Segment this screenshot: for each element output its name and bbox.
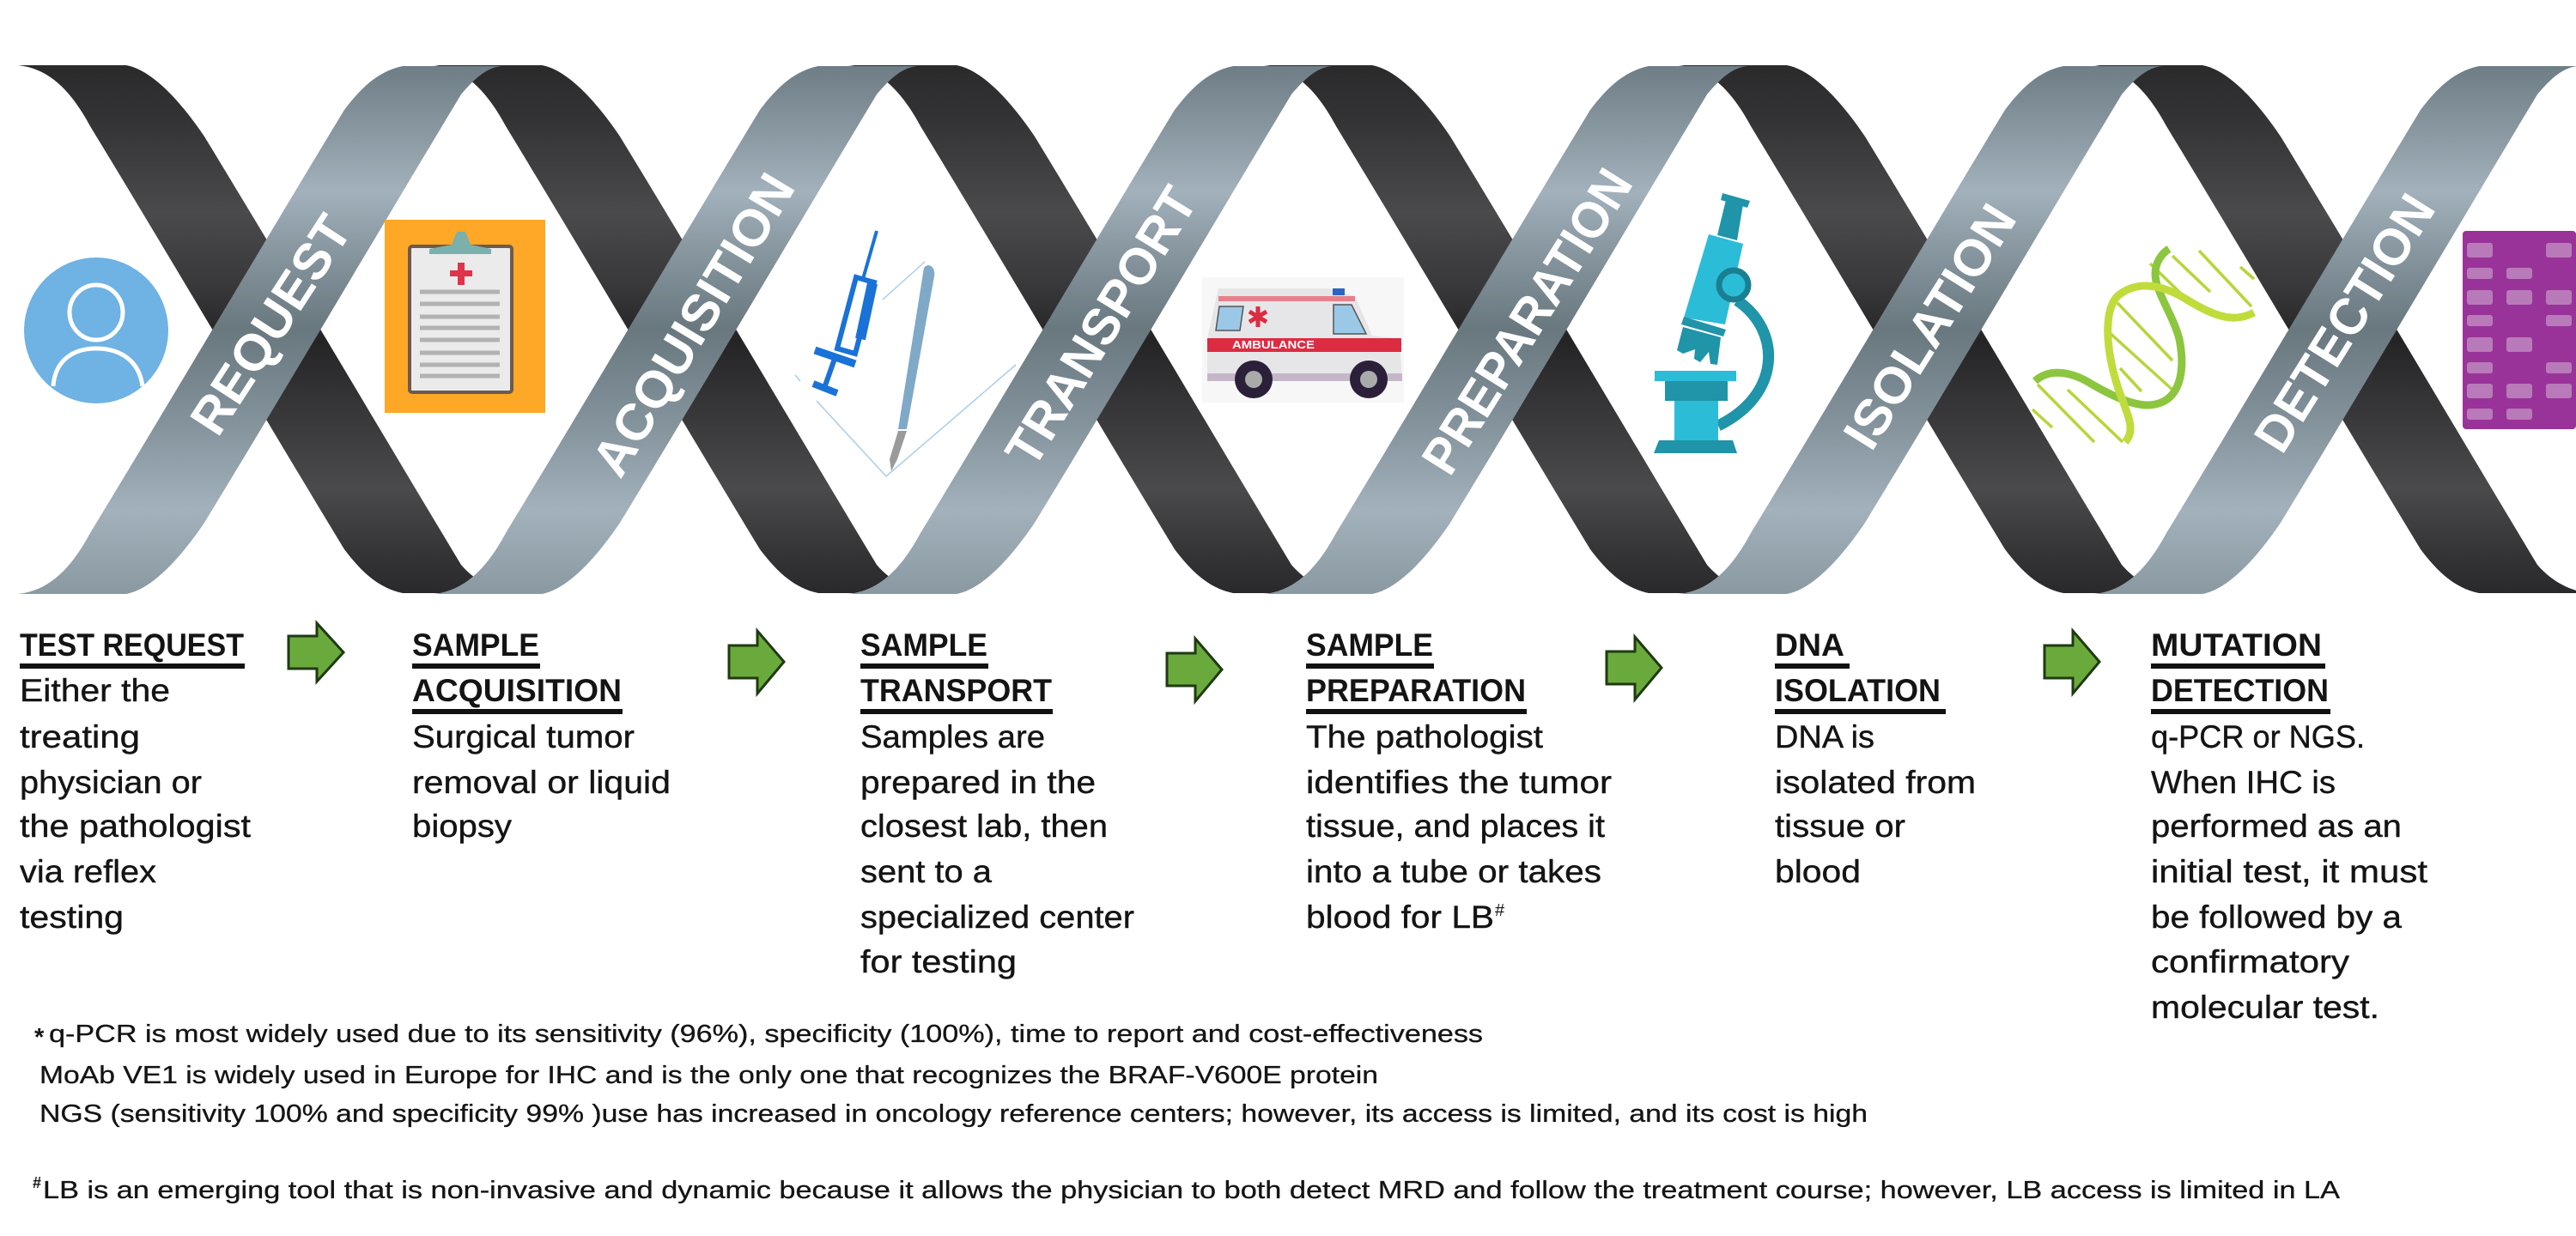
scalpel image frame lines — [795, 262, 1016, 476]
text block: DNA isolation: isolated from — [1775, 765, 1976, 800]
ribbon label: TRANSPORT: TRANSPORT — [994, 177, 1208, 476]
icon: gel electrophoresis — [2463, 231, 2576, 429]
helix ribbons — [18, 65, 2576, 594]
footnotes: q-PCR is most widely used due to its sensitivity (96%), specificity (100%), time to report and cost-effectiveness — [49, 1021, 1483, 1048]
text block: sample acquisition: Surgical tumor — [412, 719, 635, 754]
footnotes: * — [34, 1024, 45, 1051]
text block: DNA isolation: tissue or — [1775, 809, 1905, 844]
text block: sample acquisition: biopsy — [412, 809, 513, 844]
text block: test request: via reflex — [20, 854, 157, 889]
text block: sample transport — [860, 627, 1134, 979]
text block: mutation detection: q-PCR or NGS. — [2151, 719, 2365, 754]
icon: clipboard — [385, 220, 545, 413]
text block: test request: treating — [20, 719, 140, 754]
footnotes: # — [33, 1174, 41, 1191]
text block: test request: Either the — [20, 673, 170, 708]
arrow: acquisition to transport — [729, 631, 784, 694]
icon: scalpel — [890, 265, 934, 471]
text block: sample preparation: SAMPLE — [1306, 627, 1433, 663]
text block: test request: testing — [20, 900, 124, 935]
text block: mutation detection: MUTATION — [2151, 627, 2322, 663]
text block: sample preparation: PREPARATION — [1306, 673, 1526, 708]
text block: sample transport: TRANSPORT — [860, 673, 1052, 708]
text block: sample acquisition — [412, 627, 671, 844]
text block: mutation detection: initial test, it must — [2151, 854, 2428, 889]
text block: mutation detection: performed as an — [2151, 809, 2402, 844]
arrow: request to acquisition — [289, 623, 343, 682]
text block: sample preparation — [1306, 627, 1612, 935]
text block: DNA isolation — [1775, 627, 1976, 889]
footnotes: LB is an emerging tool that is non-invasive and dynamic because it allows the physician to both detect MRD and follow the treatment course; however, LB access is limited in LA — [43, 1177, 2341, 1204]
text block: sample transport: sent to a — [860, 854, 992, 889]
arrow: preparation to isolation — [1607, 637, 1662, 700]
arrow: transport to preparation — [1167, 639, 1222, 701]
dark strands — [18, 65, 2576, 593]
text block: sample acquisition: SAMPLE — [412, 627, 539, 663]
arrow: isolation to detection — [2044, 631, 2099, 694]
text block: sample transport: closest lab, then — [860, 809, 1108, 844]
text block: mutation detection — [2151, 627, 2428, 1025]
text block: sample transport: Samples are — [860, 719, 1045, 754]
footnotes: MoAb VE1 is widely used in Europe for IHC and is the only one that recognizes the BRAF-V600E protein — [39, 1062, 1378, 1089]
text block: mutation detection: be followed by a — [2151, 900, 2402, 935]
ribbon label: DETECTION: DETECTION — [2243, 184, 2446, 462]
ribbon label: PREPARATION: PREPARATION — [1411, 159, 1643, 484]
text block: mutation detection: molecular test. — [2151, 990, 2379, 1025]
footnotes — [33, 1021, 2341, 1204]
text block: mutation detection: confirmatory — [2151, 944, 2350, 979]
text block: test request: the pathologist — [20, 809, 252, 844]
text block: DNA isolation: blood — [1775, 854, 1861, 889]
icon: person — [24, 258, 168, 403]
text block: sample preparation: tissue, and places it — [1306, 809, 1606, 844]
text block: DNA isolation: DNA — [1775, 627, 1844, 663]
text block: sample transport: specialized center — [860, 900, 1134, 935]
text block: sample transport: for testing — [860, 944, 1017, 979]
text block: sample preparation: The pathologist — [1306, 719, 1544, 754]
icon: ambulance: AMBULANCE — [1232, 338, 1315, 351]
grey strands — [18, 66, 2576, 594]
icon: DNA — [2032, 249, 2254, 442]
icon: syringe — [813, 231, 877, 393]
text block: sample transport: prepared in the — [860, 765, 1096, 800]
icon: microscope — [1654, 193, 1769, 453]
text block: sample preparation: into a tube or takes — [1306, 854, 1601, 889]
text block: sample transport: SAMPLE — [860, 627, 987, 663]
text block: mutation detection: When IHC is — [2151, 765, 2336, 800]
text block: test request: physician or — [20, 765, 202, 800]
text block: test request — [20, 627, 252, 935]
icon: ambulance — [1202, 277, 1404, 403]
text block: sample preparation: identifies the tumor — [1306, 765, 1612, 800]
ribbon label: REQUEST: REQUEST — [179, 204, 362, 445]
text block: sample acquisition: ACQUISITION — [412, 673, 622, 708]
footnotes: NGS (sensitivity 100% and specificity 99% )use has increased in oncology reference centers; however, its access is limited, and its cost is high — [39, 1100, 1868, 1128]
text block: mutation detection: DETECTION — [2151, 673, 2329, 708]
text block: sample acquisition: removal or liquid — [412, 765, 671, 800]
text block: DNA isolation: ISOLATION — [1775, 673, 1941, 708]
ribbon label: ISOLATION: ISOLATION — [1832, 194, 2027, 459]
text block: DNA isolation: DNA is — [1775, 719, 1874, 754]
ribbon label: ACQUISITION: ACQUISITION — [580, 163, 806, 486]
text block: test request: TEST REQUEST — [20, 627, 244, 663]
text block: sample preparation: blood for LB — [1306, 900, 1494, 935]
text block: sample preparation: # — [1495, 901, 1505, 920]
